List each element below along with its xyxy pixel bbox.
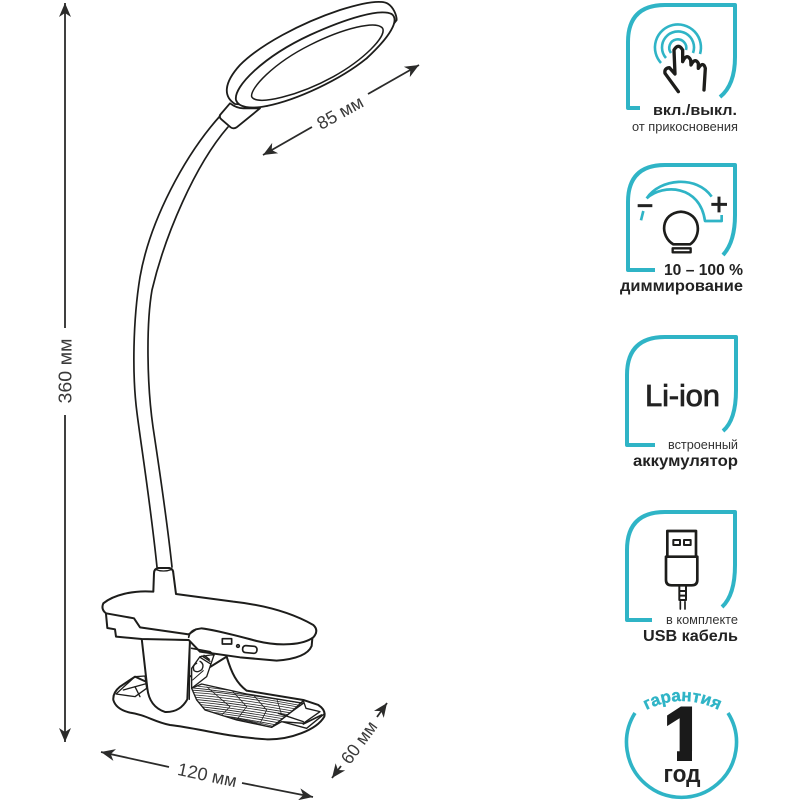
dimension: head 85 mm: 85 мм	[313, 92, 367, 134]
feature: usb cable	[627, 512, 738, 645]
minus	[638, 201, 652, 210]
icon: hand	[665, 46, 705, 92]
touch rings	[655, 24, 701, 63]
spring	[192, 655, 214, 688]
ports	[222, 639, 232, 644]
feature: battery: аккумулятор	[633, 453, 738, 470]
hatched pad	[192, 684, 303, 727]
neck collar	[155, 569, 172, 571]
caption: в комплекте	[666, 612, 738, 627]
badge: warranty: гарантия	[643, 692, 722, 710]
feature: dimming: диммирование	[620, 278, 743, 295]
inner lens	[252, 25, 383, 100]
dimension: width 120 mm: 120 мм	[176, 759, 239, 791]
dimension: head 85 mm	[263, 65, 419, 155]
head joint	[220, 103, 260, 128]
back rim	[227, 2, 397, 106]
icon frame	[628, 5, 735, 108]
feature: battery	[627, 337, 738, 470]
feature: dimming	[620, 165, 743, 295]
icon frame	[627, 337, 736, 445]
clamp base	[102, 568, 325, 739]
caption: встроенный	[668, 437, 738, 452]
icon: bulb	[664, 212, 698, 244]
unit: год	[664, 761, 700, 788]
feature: touch switch: от прикосновения	[632, 120, 738, 134]
dimension: depth 60 mm: 60 мм	[337, 717, 381, 768]
feature: usb cable: USB кабель	[643, 628, 738, 645]
caption: вкл./выкл.	[653, 102, 737, 119]
dimension: height 360 mm: 360 мм	[56, 338, 76, 404]
clip arm	[142, 638, 190, 712]
brightness arc	[638, 182, 727, 252]
dimension: depth 60 mm	[332, 703, 387, 778]
feature: touch switch	[628, 5, 738, 134]
plus	[711, 197, 727, 212]
icon frame	[627, 512, 735, 620]
icon: usb plug	[666, 531, 697, 609]
rear plate details	[116, 676, 147, 697]
upper body	[106, 612, 313, 661]
lower plate	[113, 657, 325, 739]
caption: 10 – 100 %	[664, 262, 743, 279]
icon frame	[628, 165, 735, 270]
front plate details	[272, 701, 325, 728]
number: 1	[663, 692, 705, 777]
Li-ion label: Li-ion	[645, 378, 720, 413]
front ring	[236, 12, 395, 108]
curved label	[641, 701, 724, 713]
badge: warranty	[624, 692, 738, 800]
gooseneck	[134, 116, 228, 567]
lamp head	[220, 2, 397, 128]
dimension: width 120 mm	[101, 752, 313, 797]
ring	[627, 713, 736, 797]
